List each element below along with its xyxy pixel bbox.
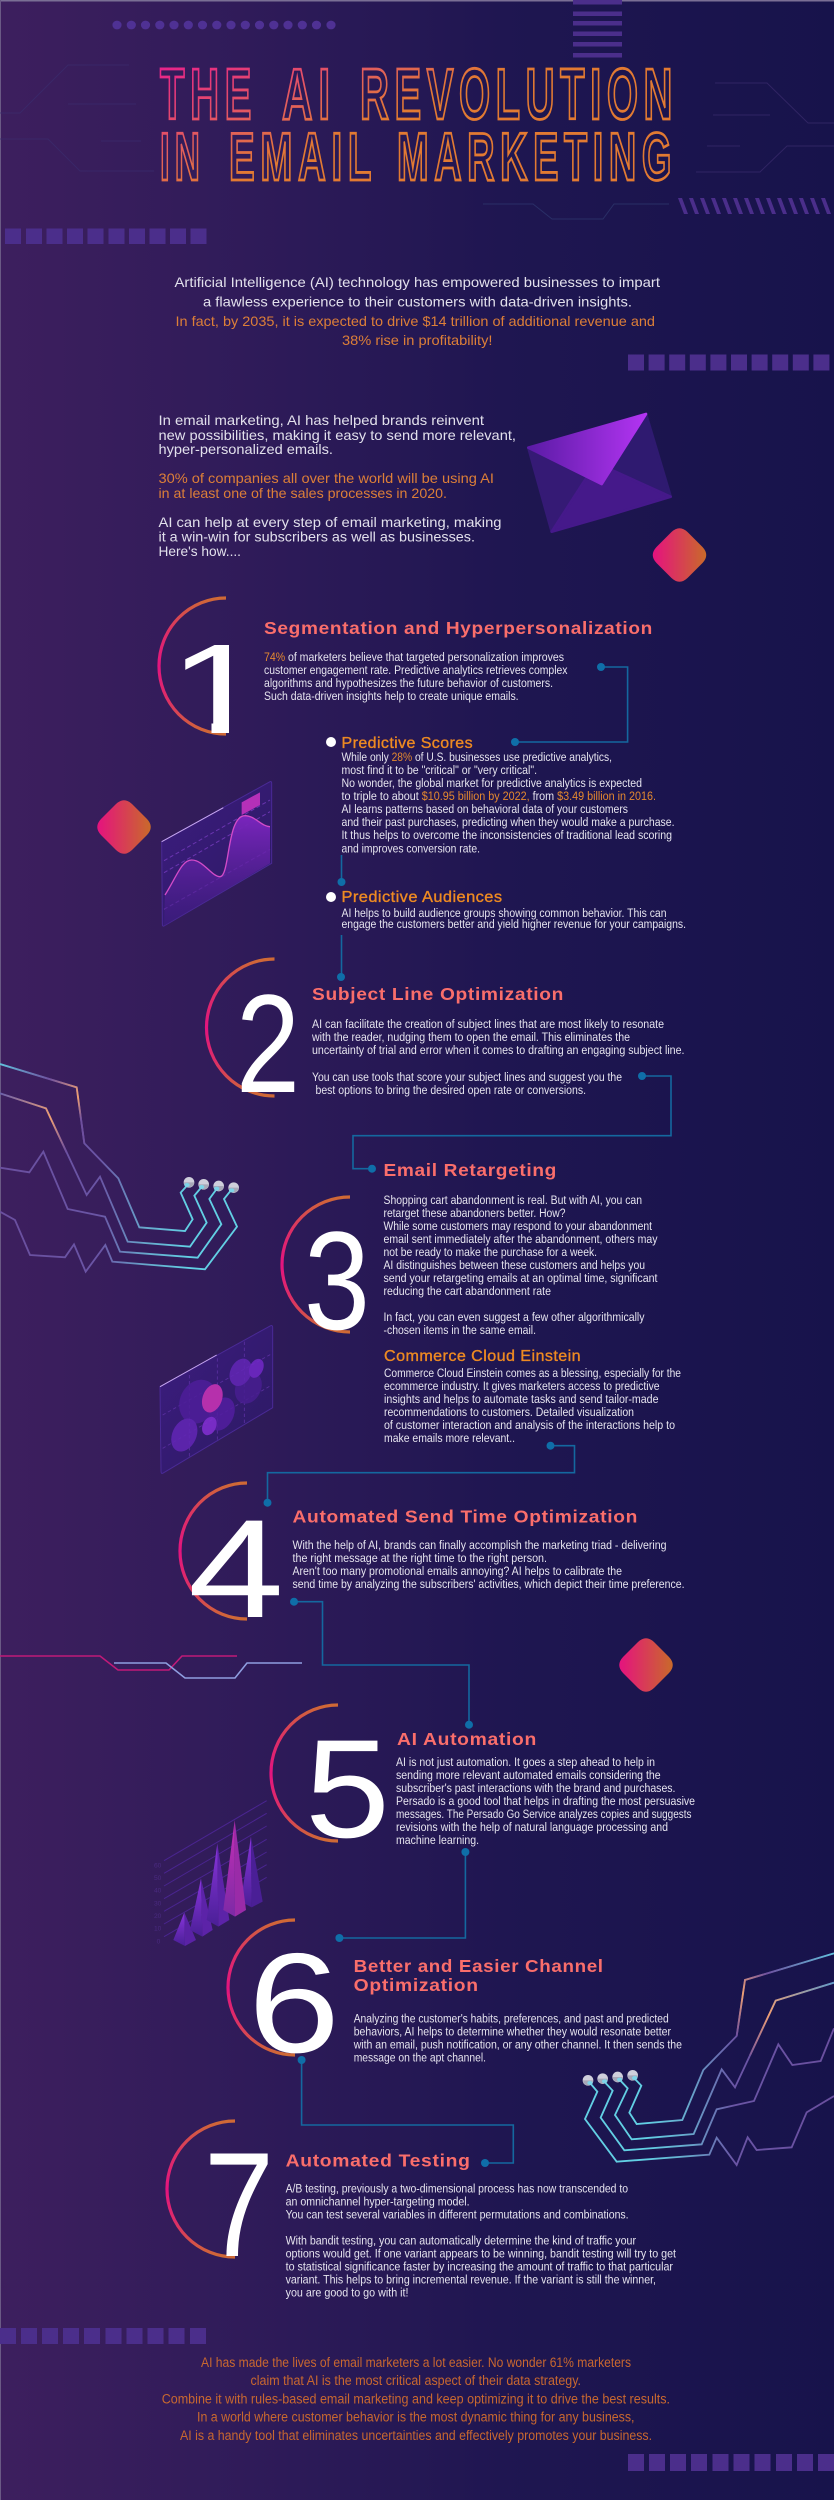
email marketing paragraph: In email marketing, AI has helped brands reinvent [158,412,484,428]
intro text: 38% rise in profitability! [342,332,492,348]
section 6: heading: Optimization [354,1975,479,1995]
section 5: number with arc [271,1705,390,1867]
section 5: body text: revisions with the help of natural language processing and [396,1820,668,1834]
commerce cloud einstein body text: ecommerce industry. It gives marketers access to predictive [384,1379,660,1393]
commerce cloud einstein body text: make emails more relevant.. [384,1431,515,1445]
connector: section 3 to section 4 [264,1442,574,1507]
section 3: body text: email sent immediately after the abandonment, others may [384,1232,658,1246]
connector: section 2 to section 3 [353,1072,671,1173]
decoration: square row lower left [0,2328,206,2344]
section 7: body text: variant. This helps to bring incremental revenue. If the variant is still the winner, [286,2273,656,2287]
section 3: body text: not be ready to make the purchase for a week. [384,1245,597,1259]
closing text: claim that AI is the most critical aspect of their data strategy. [250,2373,581,2388]
section 1: body text: customer engagement rate. Predictive analytics retrieves complex [264,663,568,677]
decoration: square row lower right [628,2454,834,2471]
icon: spike chart: 20 [154,1913,162,1920]
commerce cloud einstein body text [384,1366,681,1445]
predictive scores body text: While only 28% of U.S. businesses use predictive analytics, [342,750,612,764]
section 4: number with arc: 4 [188,1490,284,1647]
bullet: predictive audiences [326,892,336,902]
connector: audiences to section 2 [337,935,345,981]
section 4: body text: send time by analyzing the subscribers' activities, which depict their time preference. [292,1577,684,1591]
email marketing paragraph: 30% of companies all over the world will be using AI [158,470,494,486]
email marketing paragraph: hyper-personalized emails. [158,441,333,457]
icon: spike chart: 50 [154,1875,162,1882]
section 6: heading [354,1956,604,1995]
email marketing paragraph: in at least one of the sales processes in 2020. [158,485,447,501]
predictive scores body text: to triple to about $10.95 billion by 2022, from $3.49 billion in 2016. [342,789,656,803]
section 7: body text: A/B testing, previously a two-dimensional process has now transcended to [286,2182,628,2196]
title: EMAIL [229,119,377,195]
email marketing paragraph [158,412,516,559]
section 7: body text: to statistical significance faster by increasing the amount of traffic to that particular [286,2260,673,2274]
section 1: body text [264,650,568,703]
predictive scores body text: No wonder, the global market for predictive analytics is expected [342,776,642,790]
connector: section 4 to section 5 [290,1598,473,1729]
section 4: body text [292,1538,684,1591]
section 7: body text: an omnichannel hyper-targeting model. [286,2195,470,2209]
icon: envelope [528,414,671,532]
title: AI [282,55,336,135]
decoration: hatch stripes [678,198,831,214]
decoration: square row upper left [5,228,206,244]
commerce cloud einstein body text: Commerce Cloud Einstein comes as a blessing, especially for the [384,1366,681,1380]
predictive scores body text: It thus helps to overcome the inconsistencies of traditional lead scoring [342,828,672,842]
section 7: body text: you are good to go with it! [286,2286,408,2300]
decoration: square row upper right [628,354,829,370]
section 6: number with arc: 6 [248,1924,340,2083]
subheading: predictive audiences: Predictive Audiences [342,889,502,906]
section 7: body text: You can test several variables in different permutations and combinations. [286,2208,629,2222]
section 2: number with arc: 2 [236,965,300,1122]
section 7: number with arc [167,2121,274,2288]
section 1: number with arc: 1 [168,618,268,761]
icon: spike chart: 60 [154,1862,162,1869]
icon: bubble chart panel [160,1326,273,1473]
section 6: body text: behaviors, AI helps to determine whether they would resonate better [354,2025,671,2039]
commerce cloud einstein body text: recommendations to customers. Detailed visualization [384,1405,634,1419]
section 5: body text: Persado is a good tool that helps in drafting the most persuasive [396,1794,695,1808]
commerce cloud einstein body text: insights and helps to automate tasks and send tailor-made [384,1392,659,1406]
bullet: predictive scores [326,737,336,747]
section 5: body text: machine learning. [396,1833,479,1847]
predictive scores body text: and improves conversion rate. [342,842,480,856]
decoration: top bars [573,0,622,58]
section 6: body text: message on the apt channel. [354,2051,486,2065]
email marketing paragraph: new possibilities, making it easy to send more relevant, [158,427,516,443]
decoration: circuit left [0,1064,239,1272]
icon: spike chart: 10 [154,1926,162,1933]
intro text: a flawless experience to their customers with data-driven insights. [203,294,632,310]
closing text: AI has made the lives of email marketers a lot easier. No wonder 61% marketers [201,2355,631,2370]
section 2: body text: with the reader, nudging them to open the email. This eliminates the [311,1030,630,1044]
section 1: body text: algorithms and hypothesizes the future behavior of customers. [264,676,553,690]
section 1: body text: Such data-driven insights help to create unique emails. [264,689,519,703]
connector: section 5 to section 6 [335,1848,469,1942]
connector: scores to audiences [338,855,346,886]
icon: diamond top [653,528,706,582]
icon: spike chart: 30 [154,1900,162,1907]
commerce cloud einstein body text: of customer interaction and analysis of the interactions help to [384,1418,675,1432]
section 3: body text: reducing the cart abandonment rate [384,1284,551,1298]
section 2: body text: You can use tools that score your subject lines and suggest you the [312,1070,622,1084]
section 5: body text: subscriber's past interactions with the brand and purchases. [396,1781,676,1795]
section 3: body text: send your retargeting emails at an optimal time, significant [384,1271,658,1285]
section 2: heading: Subject Line Optimization [312,984,564,1004]
section 3: body text: -chosen items in the same email. [384,1323,536,1337]
predictive scores body text: and their past purchases, predicting when they would make a purchase. [342,815,674,829]
section 2: body text: AI can facilitate the creation of subject lines that are most likely to resonate [312,1017,664,1031]
section 3: body text: Shopping cart abandonment is real. But with AI, you can [384,1193,642,1207]
subheading: predictive scores: Predictive Scores [342,735,473,752]
closing text [162,2355,670,2443]
decoration: crossing lines [0,1656,302,1678]
decoration: faint circuit lines [0,65,834,219]
section 7: body text: With bandit testing, you can automatically determine the kind of traffic your [286,2234,636,2248]
closing text: Combine it with rules-based email marketing and keep optimizing it to drive the best results. [162,2392,670,2407]
email marketing paragraph: Here's how.... [158,543,241,559]
title: THE [160,55,257,135]
title [160,55,678,195]
section 2: body text: best options to bring the desired open rate or conversions. [316,1083,586,1097]
section 4: body text: Aren't too many promotional emails annoying? AI helps to calibrate the [292,1564,622,1578]
title: IN [160,119,205,195]
icon: spike chart [154,1801,267,1946]
icon: spike chart: 0 [157,1938,161,1945]
intro text [174,274,660,348]
section 5: body text: sending more relevant automated emails considering the [396,1768,661,1782]
section 3: body text: retarget these abandoners better. How? [384,1206,566,1220]
connector: section 1 to predictive scores [511,663,628,746]
section 4: heading: Automated Send Time Optimization [292,1507,638,1527]
section 3: heading: Email Retargeting [384,1160,557,1180]
icon: spike chart: 40 [154,1888,162,1895]
section 6: body text: with an email, push notification, or any other channel. It then sends the [353,2038,682,2052]
section 3: body text: While some customers may respond to your abandonment [384,1219,653,1233]
connector: section 6 to section 7 [298,2056,513,2167]
decoration: top dots [112,21,336,29]
icon: diamond right [619,1638,673,1692]
section 6: number with arc [228,1920,340,2083]
section 1: heading: Segmentation and Hyperpersonalization [264,618,653,638]
section 5: body text [396,1755,695,1847]
section 7: number with arc: 7 [204,2121,274,2288]
intro text: In fact, by 2035, it is expected to drive $14 trillion of additional revenue and [176,313,655,329]
section 7: body text: options would get. If one variant appears to be winning, bandit testing will try to get [286,2247,677,2261]
section 6: body text [353,2012,682,2065]
section 2: number with arc [206,959,300,1122]
predictive audiences body text: AI helps to build audience groups showing common behavior. This can [342,906,666,920]
section 5: body text: AI is not just automation. It goes a step ahead to help in [396,1755,655,1769]
section 5: number with arc: 5 [305,1710,390,1867]
section 2: body text [311,1017,684,1097]
section 1: number with arc [157,596,229,736]
section 4: body text: the right message at the right time to the right person. [292,1551,547,1565]
predictive audiences body text: engage the customers better and yield higher revenue for your campaigns. [342,917,686,931]
section 3: body text: AI distinguishes between these customers and helps you [384,1258,645,1272]
predictive scores body text: AI learns patterns based on behavioral data of your customers [342,802,628,816]
section 6: body text: Analyzing the customer's habits, preferences, and past and predicted [354,2012,669,2026]
section 4: body text: With the help of AI, brands can finally accomplish the marketing triad - delivering [292,1538,666,1552]
predictive audiences body text [342,906,686,931]
section 3: body text [384,1193,658,1337]
icon: diamond left [97,800,151,854]
section 1: body text: 74% of marketers believe that targeted personalization improves [264,650,564,664]
section 7: body text [286,2182,677,2300]
closing text: In a world where customer behavior is the most dynamic thing for any business, [197,2410,634,2425]
section 2: body text: uncertainty of trial and error when it comes to drafting an engaging subject line. [312,1043,684,1057]
section 3: number with arc [282,1197,370,1359]
subheading: commerce cloud einstein: Commerce Cloud Einstein [384,1348,581,1365]
closing text: AI is a handy tool that eliminates uncertainties and effectively promotes your business. [180,2428,652,2443]
section 3: number with arc: 3 [304,1202,370,1359]
section 7: heading: Automated Testing [286,2151,471,2171]
decoration: circuit right [583,1953,834,2165]
email marketing paragraph: it a win-win for subscribers as well as businesses. [158,528,475,544]
predictive scores body text: most find it to be "critical" or "very critical". [342,763,537,777]
predictive scores body text [342,750,674,856]
section 6: heading: Better and Easier Channel [354,1956,604,1976]
section 5: heading: AI Automation [397,1729,537,1749]
intro text: Artificial Intelligence (AI) technology has empowered businesses to impart [174,274,660,290]
email marketing paragraph: AI can help at every step of email marketing, making [158,514,502,530]
section 3: body text: In fact, you can even suggest a few other algorithmically [384,1310,645,1324]
section 5: body text: messages. The Persado Go Service analyzes copies and suggests [396,1807,692,1821]
icon: line chart panel [162,782,272,926]
